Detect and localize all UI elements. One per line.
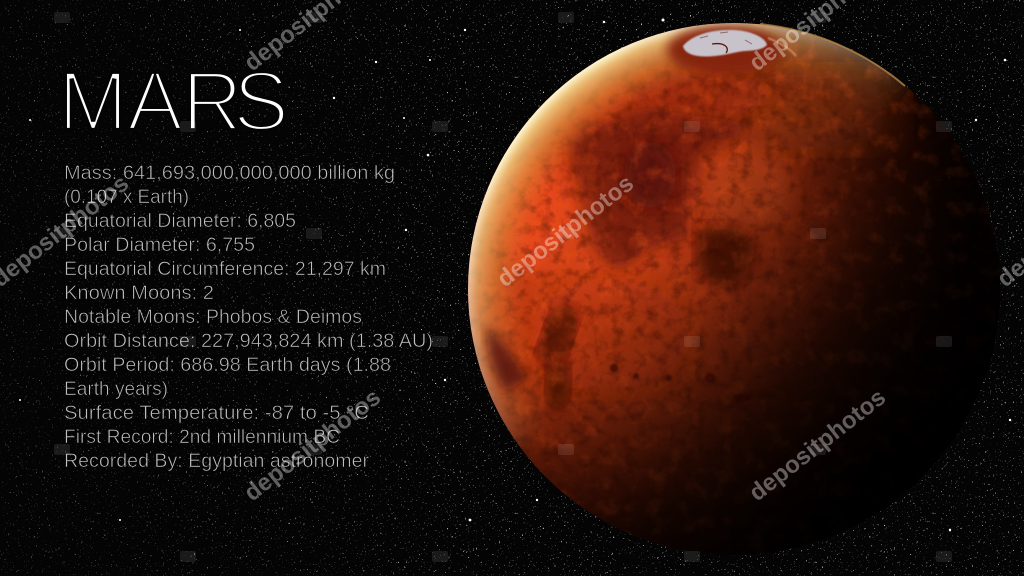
facts text block: Equatorial Circumference: 21,297 km [64, 259, 386, 280]
north polar ice cap [667, 26, 796, 74]
facts text block: Polar Diameter: 6,755 [64, 235, 255, 256]
facts text block: (0.107 x Earth) [64, 187, 189, 208]
watermarks: depositphotos [492, 170, 639, 293]
maroon dark region lower left [485, 325, 528, 392]
facts text block: First Record: 2nd millennium BC [64, 427, 340, 448]
title: MARS [58, 54, 289, 148]
facts text block: Earth years) [64, 379, 168, 400]
facts text block: Mass: 641,693,000,000,000 billion kg [64, 163, 395, 184]
watermarks: depositphotos [239, 384, 386, 507]
facts text block: Recorded By: Egyptian astronomer [64, 451, 370, 472]
facts text block: Equatorial Diameter: 6,805 [64, 211, 296, 232]
watermarks: depositphotos [744, 384, 891, 507]
facts text block [64, 163, 433, 472]
planet: Mars [460, 15, 1010, 560]
facts text block: Notable Moons: Phobos & Deimos [64, 307, 362, 328]
facts text block: Surface Temperature: -87 to -5 °C [64, 403, 369, 424]
crater spots [610, 364, 751, 402]
facts text block: Known Moons: 2 [64, 283, 214, 304]
facts text block: Orbit Distance: 227,943,824 km (1.38 AU) [64, 331, 433, 352]
planet surface markings [460, 15, 1010, 560]
facts text block: Orbit Period: 686.98 Earth days (1.88 [64, 355, 391, 376]
planet rim light [760, 24, 905, 86]
